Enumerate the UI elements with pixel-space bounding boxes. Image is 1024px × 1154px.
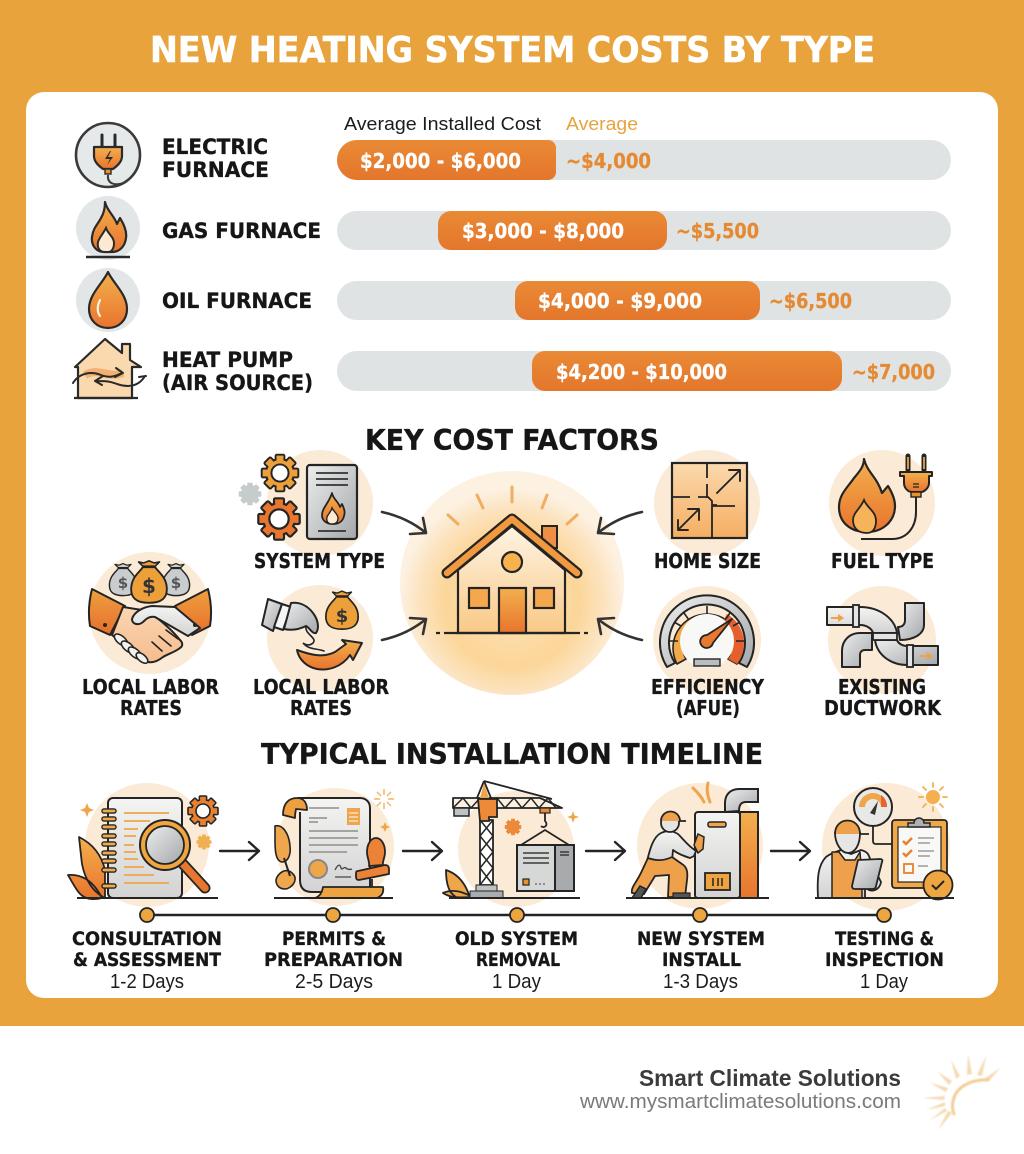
label: heat pump	[162, 348, 313, 396]
label: PERMITS &	[282, 928, 386, 950]
label: LOCAL LABOR	[253, 675, 389, 699]
step 3: old system removal	[443, 781, 580, 993]
factor: home size	[654, 450, 761, 573]
label: INSTALL	[662, 949, 741, 971]
label	[82, 675, 219, 720]
label: 1 Day	[860, 971, 908, 993]
bar: oil furnace	[337, 281, 951, 320]
panel: white content card	[26, 92, 998, 998]
label: RATES	[290, 696, 352, 720]
icon: electric plug	[76, 123, 140, 187]
bar: gas furnace: ~$5,500	[676, 219, 759, 243]
label: NEW SYSTEM	[637, 928, 765, 950]
label	[824, 675, 942, 720]
footer brand text: www.mysmartclimatesolutions.com	[579, 1091, 901, 1113]
step 2: permits	[264, 789, 403, 993]
label: SYSTEM TYPE	[254, 549, 385, 573]
icon: handshake with money bags	[89, 552, 211, 674]
label	[651, 675, 764, 720]
footer brand text: Smart Climate Solutions	[639, 1065, 901, 1091]
icon: floor plan	[654, 450, 760, 556]
icon: handshake with money bags: $	[142, 574, 156, 598]
step 5: testing and inspection	[815, 783, 954, 993]
bar: heat pump	[337, 351, 951, 391]
label: RATES	[120, 696, 182, 720]
icon: handshake with money bags: $	[118, 574, 128, 592]
label: 2-5 Days	[295, 971, 373, 993]
label: electric furnace	[162, 135, 269, 183]
label: LOCAL LABOR	[82, 675, 219, 699]
step backdrops	[85, 783, 950, 911]
section: cost comparison rows	[73, 113, 951, 398]
icon: gears and furnace panel	[239, 450, 373, 556]
footer brand text	[579, 1065, 901, 1113]
icon: oil drop	[76, 268, 140, 332]
label: EFFICIENCY	[651, 675, 764, 699]
bar: electric furnace	[337, 140, 951, 180]
bar: gas furnace	[337, 211, 951, 250]
label: oil furnace: OIL FURNACE	[162, 289, 312, 314]
label: gas furnace: GAS FURNACE	[162, 219, 321, 244]
label: FUEL TYPE	[831, 549, 934, 573]
icon: permit scroll and stamp	[274, 789, 394, 898]
step 1: consultation	[68, 796, 222, 993]
icon: duct pipes	[827, 586, 938, 694]
label	[264, 928, 403, 993]
label: TESTING &	[835, 928, 934, 950]
bar: heat pump: ~$7,000	[852, 360, 935, 384]
label: INSPECTION	[825, 949, 944, 971]
label	[637, 928, 765, 993]
icon: gauge	[653, 586, 761, 694]
icon: technician installing furnace	[626, 783, 769, 898]
bar: oil furnace: ~$6,500	[769, 289, 852, 313]
factor: fuel type	[829, 450, 935, 573]
label: HOME SIZE	[654, 549, 761, 573]
column header: average: Average	[566, 113, 638, 134]
label: REMOVAL	[476, 949, 560, 971]
factor: system type	[239, 450, 385, 573]
heading: typical installation timeline: TYPICAL INSTALLATION TIMELINE	[261, 738, 763, 771]
title: NEW HEATING SYSTEM COSTS BY TYPE	[150, 30, 875, 71]
bar: oil furnace: $4,000 - $9,000	[538, 289, 702, 313]
label: (AFUE)	[676, 696, 740, 720]
icon: handshake with money bags: $	[171, 574, 181, 592]
label: heat pump: HEAT PUMP	[162, 348, 293, 373]
timeline arrows	[220, 842, 810, 860]
timeline line with dots	[140, 908, 891, 922]
label: CONSULTATION	[72, 928, 222, 950]
icon: notebook and magnifier	[68, 796, 218, 899]
label: & ASSESSMENT	[73, 949, 221, 971]
icon: gas flame	[76, 196, 140, 260]
factor: local labor rates (hand and bag)	[253, 585, 389, 720]
icon: flame and plug	[829, 450, 935, 556]
label: OLD SYSTEM	[455, 928, 578, 950]
bar: gas furnace: $3,000 - $8,000	[462, 219, 624, 243]
label: PREPARATION	[264, 949, 403, 971]
label	[72, 928, 222, 993]
icon: inspector with clipboard	[815, 783, 954, 900]
label: heat pump: (AIR SOURCE)	[162, 371, 313, 396]
label: EXISTING	[838, 675, 926, 699]
bar: heat pump: $4,200 - $10,000	[556, 360, 727, 384]
label: DUCTWORK	[824, 696, 942, 720]
factor: efficiency	[651, 586, 764, 720]
column header: average installed cost: Average Installed Cost	[344, 113, 541, 134]
label	[253, 675, 389, 720]
bar: electric furnace: $2,000 - $6,000	[360, 149, 521, 173]
heading: key cost factors: KEY COST FACTORS	[365, 424, 659, 457]
label: electric furnace: FURNACE	[162, 158, 269, 183]
label: electric furnace: ELECTRIC	[162, 135, 268, 160]
factor: local labor rates (handshake)	[82, 552, 219, 720]
factor: existing ductwork	[824, 586, 942, 720]
label: 1-3 Days	[663, 971, 738, 993]
label: 1-2 Days	[110, 971, 184, 993]
icon: hand passing money: $	[336, 606, 348, 627]
label: 1 Day	[492, 971, 541, 993]
step 4: new system install	[626, 783, 769, 993]
label	[825, 928, 944, 993]
logo: sun	[923, 1054, 1000, 1130]
label	[455, 928, 578, 993]
icon: heat pump house	[73, 339, 146, 398]
icon: crane lifting unit	[443, 781, 580, 898]
illustration: central house	[400, 471, 624, 695]
arrows into house	[382, 512, 642, 640]
bar: electric furnace: ~$4,000	[566, 149, 651, 173]
